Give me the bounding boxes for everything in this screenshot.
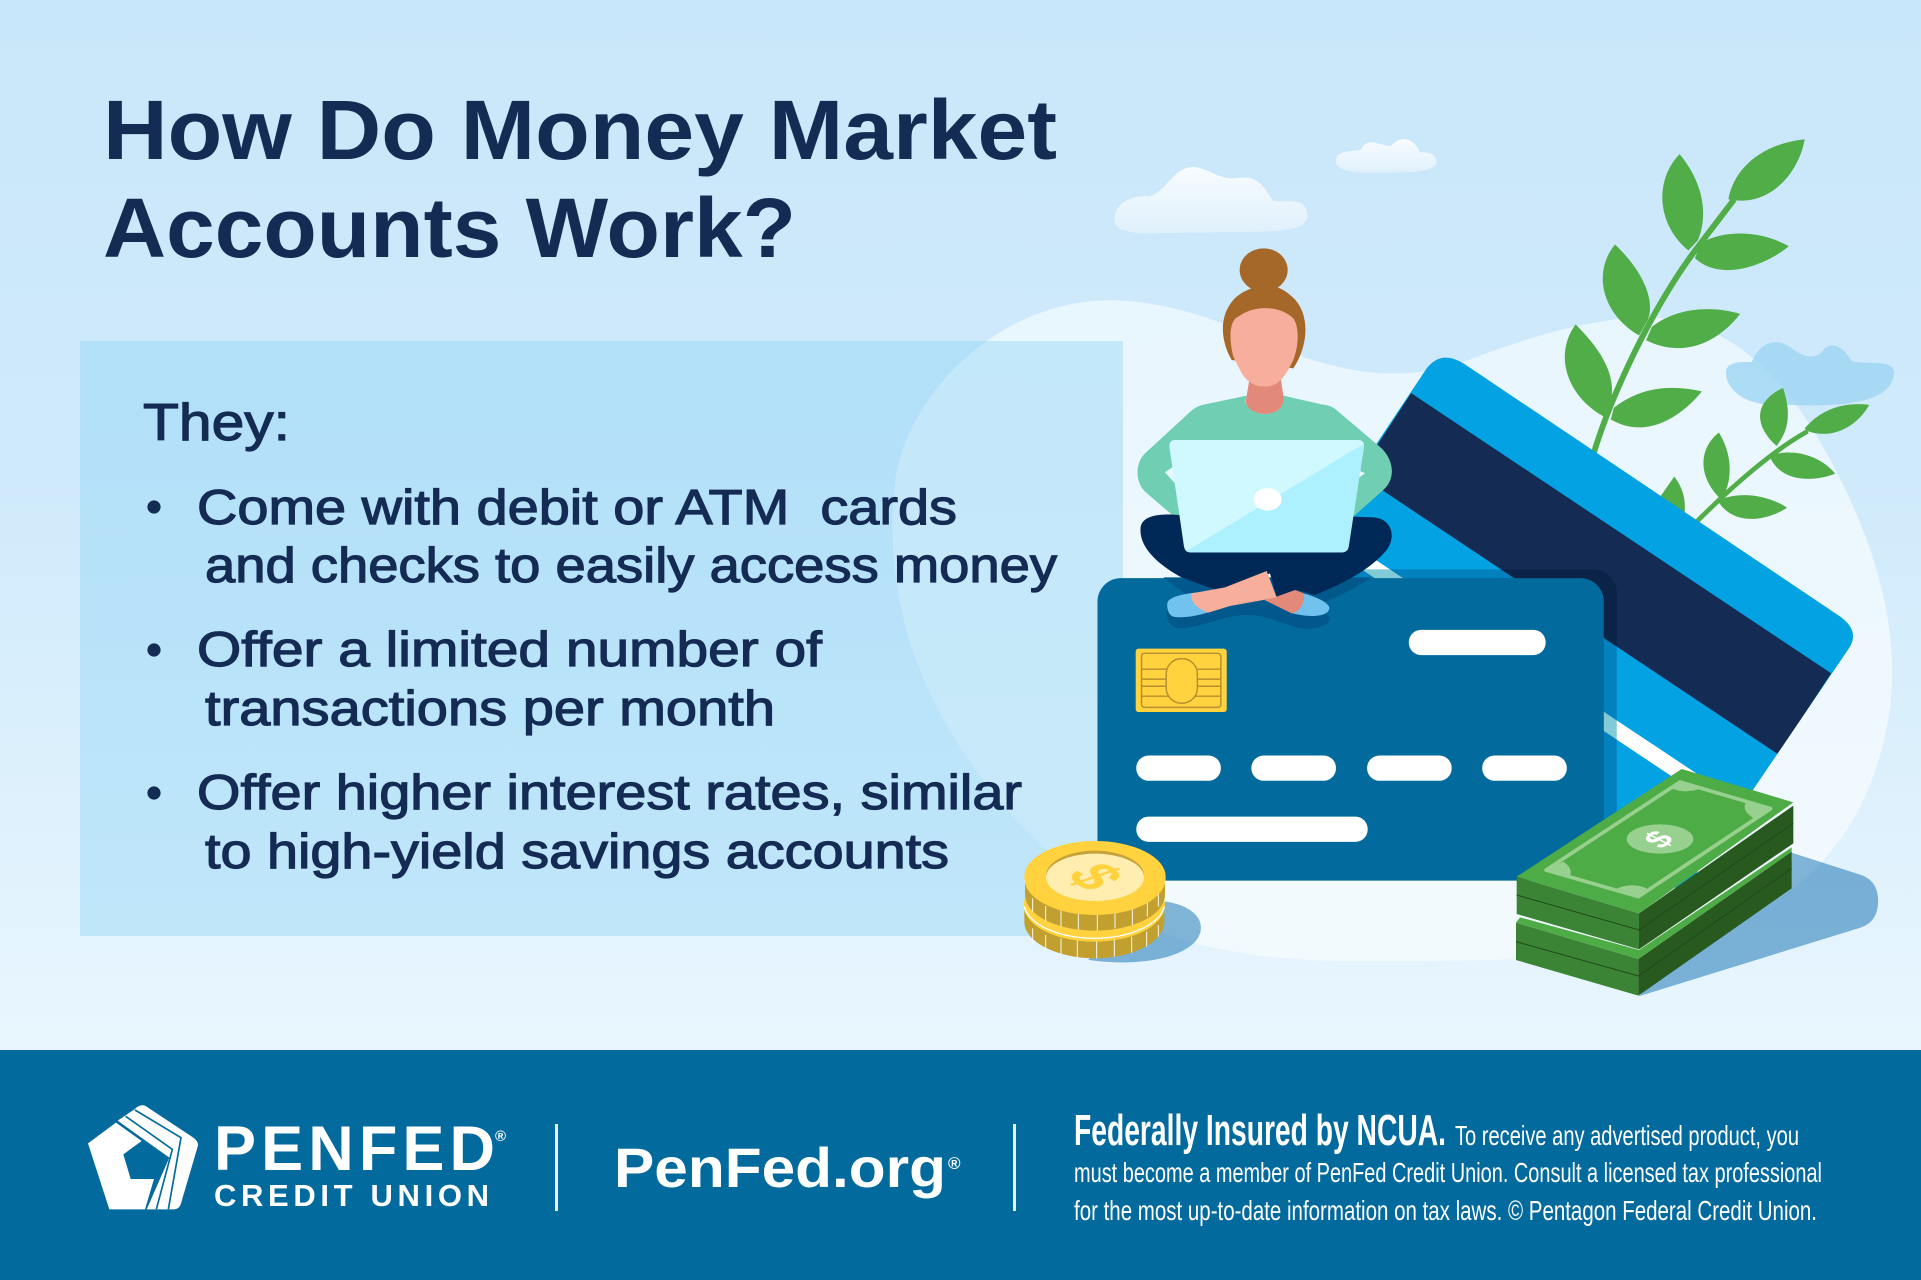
bullet list: Offer a limited number of: [197, 623, 822, 677]
plant: small branch: [1661, 388, 1869, 522]
logo wordmark: PENFED: [214, 1114, 495, 1184]
title: Accounts Work?: [103, 181, 796, 275]
card chip: [1136, 649, 1227, 712]
plant: large branch: [1565, 139, 1805, 455]
bullet list: and checks to easily access money: [205, 539, 1058, 593]
website: ®: [948, 1154, 961, 1173]
logo: PenFed pentagon: [88, 1105, 198, 1209]
logo wordmark: [214, 1114, 506, 1213]
divider: [1013, 1124, 1016, 1211]
title: [103, 83, 1057, 275]
coins: $: [1052, 856, 1139, 897]
footer band: [0, 1050, 1921, 1280]
clouds: [1115, 139, 1894, 405]
banknote detail: $: [1635, 825, 1682, 853]
laptop: [1169, 440, 1364, 552]
bullet list: to high-yield savings accounts: [205, 825, 949, 879]
left foot: [1191, 571, 1277, 613]
face: [1231, 308, 1298, 387]
person with laptop: [1137, 248, 1392, 629]
coin shadow: [1088, 901, 1201, 962]
person shadow: [1163, 577, 1372, 629]
bullet list: Come with debit or ATM cards: [197, 481, 957, 535]
disclaimer: [1074, 1106, 1822, 1226]
cash stack: [1516, 769, 1793, 996]
shoes: [1167, 592, 1329, 617]
illustration: [1098, 139, 1894, 907]
coins: [1024, 841, 1166, 958]
website: PenFed.org: [614, 1136, 946, 1199]
disclaimer: Federally Insured by NCUA.: [1074, 1106, 1446, 1155]
front credit card: [1098, 578, 1604, 881]
sweater: [1137, 396, 1392, 522]
legs: [1140, 514, 1392, 597]
logo wordmark: CREDIT UNION: [214, 1178, 489, 1213]
arm gaps: [1165, 467, 1365, 483]
right foot: [1264, 590, 1304, 613]
logo wordmark: ®: [495, 1128, 506, 1145]
hair: [1223, 248, 1305, 368]
background blob: [892, 300, 1892, 961]
intro text: They:: [143, 394, 290, 452]
banknote detail: [1545, 781, 1772, 897]
back credit card: [1352, 358, 1853, 888]
panel: key points: [80, 341, 1123, 936]
bullet list: Offer higher interest rates, similar: [197, 766, 1022, 820]
bullet list: transactions per month: [205, 682, 775, 736]
title: How Do Money Market: [103, 83, 1057, 177]
neck: [1246, 380, 1284, 414]
card detail pills: [1136, 630, 1567, 842]
bullet list: [148, 481, 1058, 879]
disclaimer: To receive any advertised product, you: [1455, 1120, 1799, 1151]
divider: [555, 1124, 558, 1211]
cash shadow: [1638, 851, 1878, 996]
